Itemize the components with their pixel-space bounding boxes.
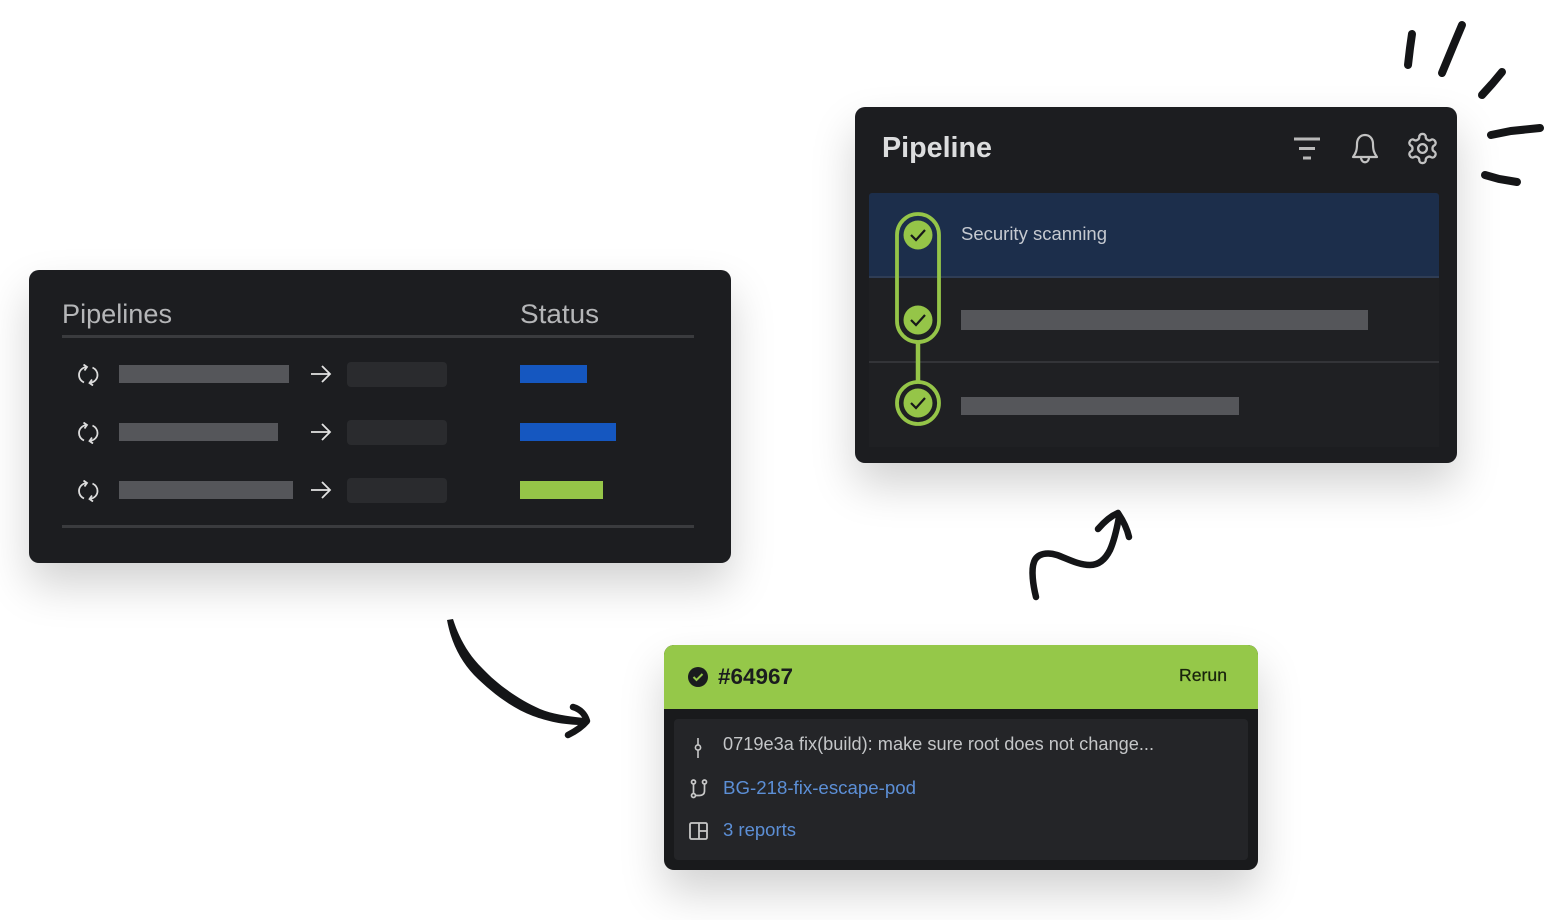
placeholder bar <box>961 310 1368 330</box>
heading: Pipeline: Pipeline <box>882 132 992 164</box>
arrow: curved down to build card <box>447 619 590 738</box>
placeholder bar <box>961 397 1239 415</box>
rerun button: Rerun <box>1179 665 1227 685</box>
row: second step <box>869 278 1439 363</box>
target placeholder <box>347 478 447 503</box>
label: Security scanning: Security scanning <box>961 224 1107 244</box>
icon: sync <box>78 480 98 502</box>
build number: #64967 <box>718 664 793 689</box>
row 2 <box>78 420 616 445</box>
branch link: BG-218-fix-escape-pod <box>723 778 916 798</box>
status bar: blue <box>520 365 587 383</box>
panel: pipeline detail <box>855 107 1457 463</box>
icon: bell <box>1352 134 1378 164</box>
arrow: squiggle up to pipeline panel <box>1029 510 1132 600</box>
name bar <box>119 365 289 383</box>
arrow <box>311 423 332 441</box>
panel: pipelines list <box>29 270 731 563</box>
status bar: blue <box>520 423 616 441</box>
row: security scanning <box>869 193 1439 278</box>
icon: gear <box>1408 132 1437 164</box>
commit message: 0719e3a fix(build): make sure root does not change... <box>723 734 1154 754</box>
icon: filter <box>1294 138 1320 160</box>
icon: commit <box>694 738 702 758</box>
heading: Status: Status <box>520 299 599 329</box>
step tracker <box>895 212 941 426</box>
row: third step <box>869 363 1439 447</box>
row 1 <box>78 362 587 387</box>
icon: sync <box>78 364 98 386</box>
icon: branch <box>690 779 708 798</box>
arrow <box>311 481 332 499</box>
target placeholder <box>347 362 447 387</box>
icon: check circle <box>688 667 708 687</box>
panel: build card <box>664 645 1258 870</box>
icon: reports <box>689 822 708 840</box>
card body <box>674 719 1248 860</box>
header: green bar <box>664 645 1258 709</box>
decoration: burst lines <box>1404 21 1544 186</box>
status bar: green <box>520 481 603 499</box>
name bar <box>119 481 293 499</box>
header divider <box>62 335 694 338</box>
icon: sync <box>78 422 98 444</box>
target placeholder <box>347 420 447 445</box>
footer divider <box>62 525 694 528</box>
row 3 <box>78 478 603 503</box>
heading: Pipelines: Pipelines <box>62 299 172 329</box>
arrow <box>311 365 332 383</box>
name bar <box>119 423 278 441</box>
reports link: 3 reports <box>723 820 796 840</box>
